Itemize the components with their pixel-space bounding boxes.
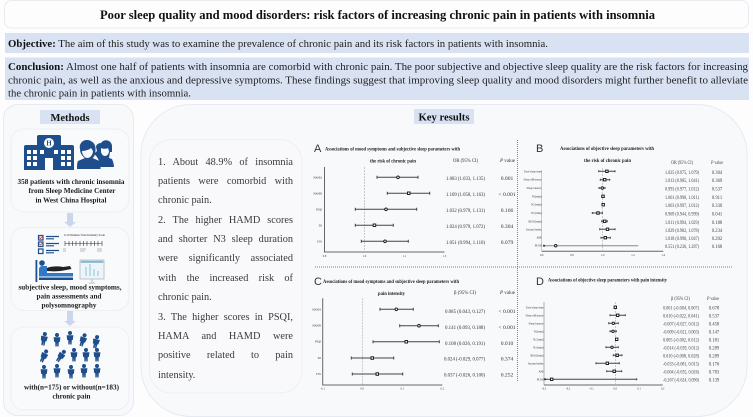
chart C: 0.085 (0.043, 0.127) [445, 308, 485, 315]
chart B: Associations of objective sleep parameters with [560, 146, 654, 152]
chart D: N1(min) [534, 330, 544, 333]
chart C: 0.037 (-0.026, 0.100) [444, 372, 485, 378]
chart C: -0.1 [320, 388, 326, 390]
card: patients [11, 129, 129, 212]
chart A: ISI [319, 224, 322, 227]
chart B: N3 (min) [531, 212, 542, 215]
chart A: 1.083 (1.033, 1.135) [446, 175, 485, 182]
chart D: -0.1 [589, 388, 594, 390]
chart A: 0.166 [501, 208, 513, 214]
text: patients: 358 patients with chronic insomnia [18, 177, 125, 186]
text block: key findings: with the increased risk of [158, 273, 293, 284]
chart A: Associations of mood symptoms and subjective sleep parameters with [325, 146, 460, 152]
panel: key results [141, 104, 747, 416]
arrow [64, 213, 76, 227]
chart B: 0.537 [712, 188, 723, 192]
chart C: ISI [318, 357, 321, 360]
chart B: 0.969 (0.944, 0.999) [665, 212, 699, 218]
text block: key findings: positive related to pain [158, 350, 293, 361]
conclusion: the chronic pain in patients with insomnia. [8, 88, 191, 100]
chart D: N2 (min) [533, 338, 544, 341]
text: patients [18, 177, 125, 204]
text block: key findings: 1. About 48.9% of insomnia [158, 156, 293, 168]
chart B: 1.013 (0.985, 1.041) [665, 179, 699, 184]
chart D: Sleep efficiency [525, 314, 544, 317]
chart B: 1.025 (0.975, 1.079) [665, 171, 699, 176]
chart B: 0.911 [712, 196, 723, 201]
chart A: ESS [317, 240, 322, 243]
chart A: HAMA [313, 176, 322, 179]
chart D: Associations of objective sleep parameters with pain intensity [548, 278, 667, 284]
card: groups [11, 327, 129, 410]
text block: key findings [158, 156, 293, 381]
chart C: 0.108 (0.026, 0.191) [445, 340, 485, 347]
chart D: -0.014 (-0.039, 0.012) [663, 346, 699, 352]
chart D: -0.267 (-0.624, 0.090) [663, 378, 699, 384]
text: assessments [18, 282, 122, 310]
chart C: ESS [316, 373, 321, 376]
text: patients: from Sleep Medicine Center [28, 186, 116, 195]
chart D: 0.678 [709, 306, 720, 312]
chart D: REM (min) [531, 354, 544, 357]
chart D: -0.009 (-0.021, 0.003) [663, 330, 699, 336]
text: groups [24, 382, 120, 400]
icon: checklist [38, 236, 59, 254]
chart C: < 0.001 [498, 325, 516, 331]
text block: key findings: chronic pain. [158, 292, 212, 303]
chart D: 0.010 (-0.022, 0.041) [663, 314, 699, 320]
chart D: 0.537 [709, 314, 720, 320]
chart B: N2 (min) [531, 204, 542, 207]
chart C: pain intensity [378, 291, 405, 297]
chart D: 0.2 [661, 388, 665, 390]
heading: methods [40, 110, 100, 124]
chart D: β (95% CI) [671, 297, 690, 302]
text block: key findings: chronic pain. [158, 195, 212, 206]
chart C: HAMD [312, 325, 321, 328]
chart D: -0.004 (-0.035, 0.026) [663, 370, 699, 376]
chart B: Arousal index [526, 228, 542, 231]
heading: key results [414, 109, 474, 124]
chart B: 0.234 [712, 229, 723, 234]
icon: pain figures [38, 331, 101, 378]
chart D: 0.783 [709, 370, 720, 376]
chart D: Sleep latency [528, 322, 544, 325]
chart A: 1.1 [403, 255, 407, 258]
card: key findings background [150, 140, 302, 393]
chart D: 0.0 [614, 388, 618, 390]
chart B: B [536, 143, 543, 155]
chart B: 0.330 [712, 204, 723, 209]
chart A: 1.024 (0.979, 1.072) [446, 223, 485, 230]
chart A: 1.0 [363, 255, 367, 258]
chart B: 0.041 [712, 212, 723, 218]
conclusion: chronic pain, as well as the anxious and depressive symptoms. These findings suggest that improving sleep quality and mood disorders might further benefit to alleviate [8, 76, 749, 86]
chart C: 0.024 (-0.029, 0.077) [444, 356, 485, 362]
chart D: N3 (min) [533, 346, 544, 349]
title: Poor sleep quality and mood disorders: risk factors of increasing chronic pain in patients with insomnia [100, 8, 656, 22]
text: assessments: polysomnography [42, 300, 97, 310]
chart A [313, 143, 516, 258]
chart A: 1.051 (0.994, 1.110) [446, 239, 485, 246]
chart A: OR (95% CI) [453, 157, 478, 164]
chart C: 0.1 [401, 388, 405, 390]
chart C: 0.010 [501, 341, 513, 347]
chart B: AHI [537, 237, 542, 240]
chart D: -0.3 [542, 388, 547, 390]
chart B: 0.8 [570, 254, 574, 257]
chart A: 0.079 [501, 240, 513, 246]
chart A: 1.032 (0.979, 1.131) [446, 207, 485, 214]
chart D: -0.2 [566, 388, 571, 390]
chart C: 0.141 (0.093, 0.188) [445, 324, 485, 331]
icon: patient in bed [36, 260, 73, 282]
chart B: 0.6 [540, 254, 544, 257]
chart D: 0.139 [709, 378, 720, 384]
chart B: 0.993 (0.977, 1.012) [665, 188, 699, 192]
chart B: the risk of chronic pain [584, 158, 631, 164]
chart D: D [536, 276, 544, 288]
chart D: 0.1 [637, 388, 641, 390]
chart B: 0.202 [712, 237, 723, 242]
chart C: C [314, 276, 322, 288]
chart C [312, 276, 516, 390]
chart B: 0.304 [712, 171, 723, 176]
icon: hospital: H [46, 140, 52, 148]
chart B: 0.188 [712, 221, 723, 226]
chart D: 0.001 (-0.004, 0.007) [663, 306, 699, 312]
chart C: HAMA [312, 308, 321, 311]
chart D: -0.033 (-0.081, 0.015) [663, 362, 699, 368]
chart A: 0.304 [501, 224, 513, 230]
chart A: 0.001 [501, 176, 513, 182]
chart D: Total sleep time [526, 306, 544, 309]
chart A: 1.109 (1.058, 1.163) [446, 191, 485, 198]
chart D: 0.010 (-0.008, 0.028) [663, 354, 699, 360]
chart B [523, 143, 723, 257]
chart B: 1.029 (0.982, 1.078) [665, 229, 699, 234]
text block: key findings: intensity. [158, 370, 195, 381]
chart B: Total sleep time [524, 170, 542, 173]
text: patients: in West China Hospital [36, 196, 106, 204]
chart B: 1.001 (0.990, 1.011) [665, 196, 699, 201]
chart B: N1(min) [532, 195, 542, 198]
chart A: P value [499, 158, 515, 164]
heading: key results: Key results [418, 112, 470, 124]
chart B: P value [710, 161, 723, 166]
chart B: 0.168 [712, 245, 723, 250]
text block: key findings: were significantly associated [158, 253, 293, 264]
conclusion [5, 58, 749, 100]
chart B: Sleep latency [526, 187, 542, 190]
text: groups: chronic pain [52, 392, 90, 400]
chart C: Associations of mood symptoms and subjective sleep parameters with [323, 279, 459, 285]
text: assessments: pain assessments and [36, 292, 102, 300]
chart D: 0.147 [709, 330, 720, 336]
objective [5, 33, 749, 53]
chart A: the risk of chronic pain [370, 158, 416, 164]
chart B: 0.369 [712, 179, 723, 184]
text block: key findings: HAMA and HAMD were [158, 331, 293, 342]
chart A: 0.8 [323, 255, 327, 258]
chart C: PSQI [315, 341, 321, 344]
chart C: 0.0 [361, 388, 365, 390]
panel: methods [4, 104, 134, 416]
chart C: < 0.001 [498, 309, 516, 315]
chart A: < 0.001 [498, 192, 516, 198]
chart D: 0.181 [709, 338, 720, 344]
chart A: PSQI [316, 208, 322, 211]
heading: methods: Methods [50, 113, 90, 124]
chart B: 1.018 (0.990, 1.047) [665, 237, 699, 242]
text: groups: with(n=175) or without(n=183) [24, 382, 120, 392]
chart C: 0.252 [501, 372, 513, 378]
text block: key findings: 2. The higher HAMD scores [158, 215, 293, 226]
chart C: P value [499, 290, 515, 296]
text block: key findings: patients were comorbid with [158, 176, 293, 187]
chart D: PLMI [537, 378, 544, 381]
text block: key findings: 3. The higher scores in PSQI, [158, 312, 293, 323]
text block: key findings: and shorter N3 sleep duration [158, 234, 293, 245]
chart D: 0.176 [709, 362, 720, 368]
conclusion: Conclusion: Almost one half of patients with insomnia are comorbid with chronic pain. The poor subjective and objective sleep quality are the risk factors for increasing [8, 62, 748, 73]
chart B: Sleep efficiency [523, 179, 542, 182]
chart B: REM (min) [529, 220, 542, 223]
chart D: 0.289 [709, 346, 720, 352]
chart B: 1.011 (0.994, 1.029) [665, 221, 699, 226]
chart D: 0.458 [709, 322, 720, 328]
chart B: 1.0 [601, 254, 605, 257]
chart B: 1.4 [662, 254, 666, 257]
arrow [64, 311, 76, 326]
separators [315, 140, 733, 382]
title [4, 0, 748, 28]
chart D: Arousal index [528, 362, 544, 365]
chart B: 1.003 (0.997, 1.012) [665, 204, 699, 209]
chart C: 0.2 [441, 388, 445, 390]
chart B: 0.551 (0.236, 1.287) [665, 245, 699, 250]
text: assessments: subjective sleep, mood symptoms, [18, 282, 122, 292]
chart B: OR (95% CI) [671, 161, 693, 166]
objective: Objective: The aim of this study was to examine the prevalence of chronic pain and its risk factors in patients with insomnia. [8, 39, 548, 50]
chart D: -0.007 (-0.027, 0.012) [663, 322, 699, 328]
icon: monitor [80, 260, 104, 283]
chart A: A [314, 143, 322, 155]
chart A: HAMD [313, 192, 322, 195]
chart D: 0.289 [709, 354, 720, 360]
card: assessments [11, 228, 129, 310]
icon: doctors [77, 140, 114, 169]
chart C: β (95% CI) [454, 289, 476, 296]
chart D: AHI [539, 370, 544, 373]
chart C: 0.374 [501, 356, 513, 362]
chart D: P value [706, 297, 719, 302]
icon: pain scale: 0-10 Numeric Pain Intensity Scale [64, 234, 106, 237]
chart A: 1.3 [443, 255, 447, 258]
chart D: 0.005 (-0.002, 0.012) [663, 338, 699, 344]
chart B: 1.2 [631, 254, 635, 257]
chart D [525, 276, 720, 390]
chart B: PLMI [535, 245, 542, 248]
